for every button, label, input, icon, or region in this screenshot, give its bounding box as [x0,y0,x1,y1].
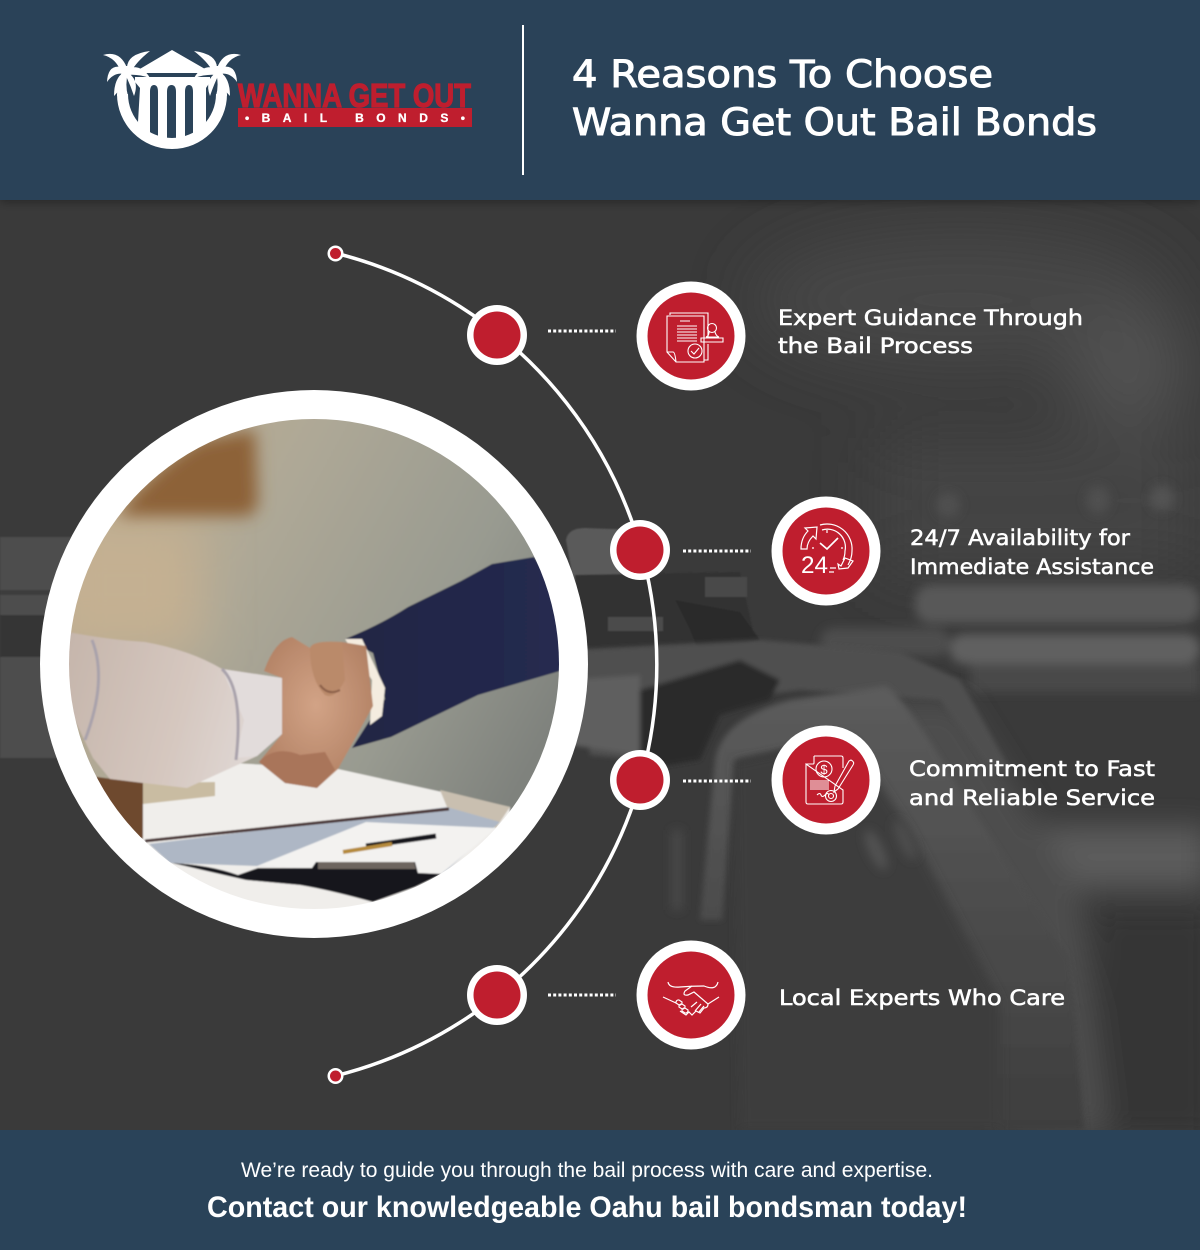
title: 4 Reasons To Choose [572,53,993,96]
footer line 2: Contact our knowledgeable Oahu bail bondsman today! [207,1191,967,1224]
icon: signed contract with pen [806,756,854,804]
text: fast service [909,757,1155,811]
logo: Wanna Get Out Bail Bonds [103,50,472,149]
arc end dot bottom [328,1068,344,1084]
text: availability: 24/7 Availability for [910,526,1130,551]
arc end dot top [328,246,344,262]
title [572,53,1097,144]
text: local experts: Local Experts Who Care [779,986,1065,1011]
text: expert guidance: Expert Guidance Through [778,306,1083,331]
item 4: local experts [467,940,1065,1050]
timeline node 3 [610,750,670,810]
text: fast service: Commitment to Fast [909,757,1155,782]
icon: document and stamp [667,313,723,362]
footer line 1: We’re ready to guide you through the bail process with care and expertise. [241,1158,933,1182]
item 3: fast service [610,726,1155,834]
timeline node 2 [610,520,670,580]
item 1: expert guidance [467,282,1083,390]
footer band [0,1130,1200,1250]
header band [0,0,1200,200]
icon: 24 hour clock: 24 [801,552,828,579]
logo: Wanna Get Out Bail Bonds: WANNA GET OUT [238,77,471,114]
timeline node 4 [467,965,527,1025]
left car band [0,537,75,758]
title: Wanna Get Out Bail Bonds [572,101,1097,144]
text: availability [910,526,1154,580]
logo: Wanna Get Out Bail Bonds: •BAIL BONDS• [245,111,465,125]
icon: 24 hour clock [801,524,853,579]
item 2: availability [610,496,1154,606]
photo: handshake in white ring [40,390,588,938]
curved timeline arc [335,253,657,1076]
text: fast service: and Reliable Service [909,786,1155,811]
roof light [566,528,640,590]
text: expert guidance: the Bail Process [778,334,973,359]
background: blurred monochrome taxi street scene [0,200,1200,1138]
text: availability: Immediate Assistance [910,555,1154,580]
icon: handshake [663,982,719,1015]
timeline node 1 [467,305,527,365]
navy suit sleeve [345,557,570,748]
clasped hands [259,637,373,788]
icon: signed contract with pen: $ [820,762,828,777]
text: expert guidance [778,306,1083,359]
car body [575,640,1010,770]
white shirt sleeve [69,632,256,788]
table and papers [141,762,511,909]
